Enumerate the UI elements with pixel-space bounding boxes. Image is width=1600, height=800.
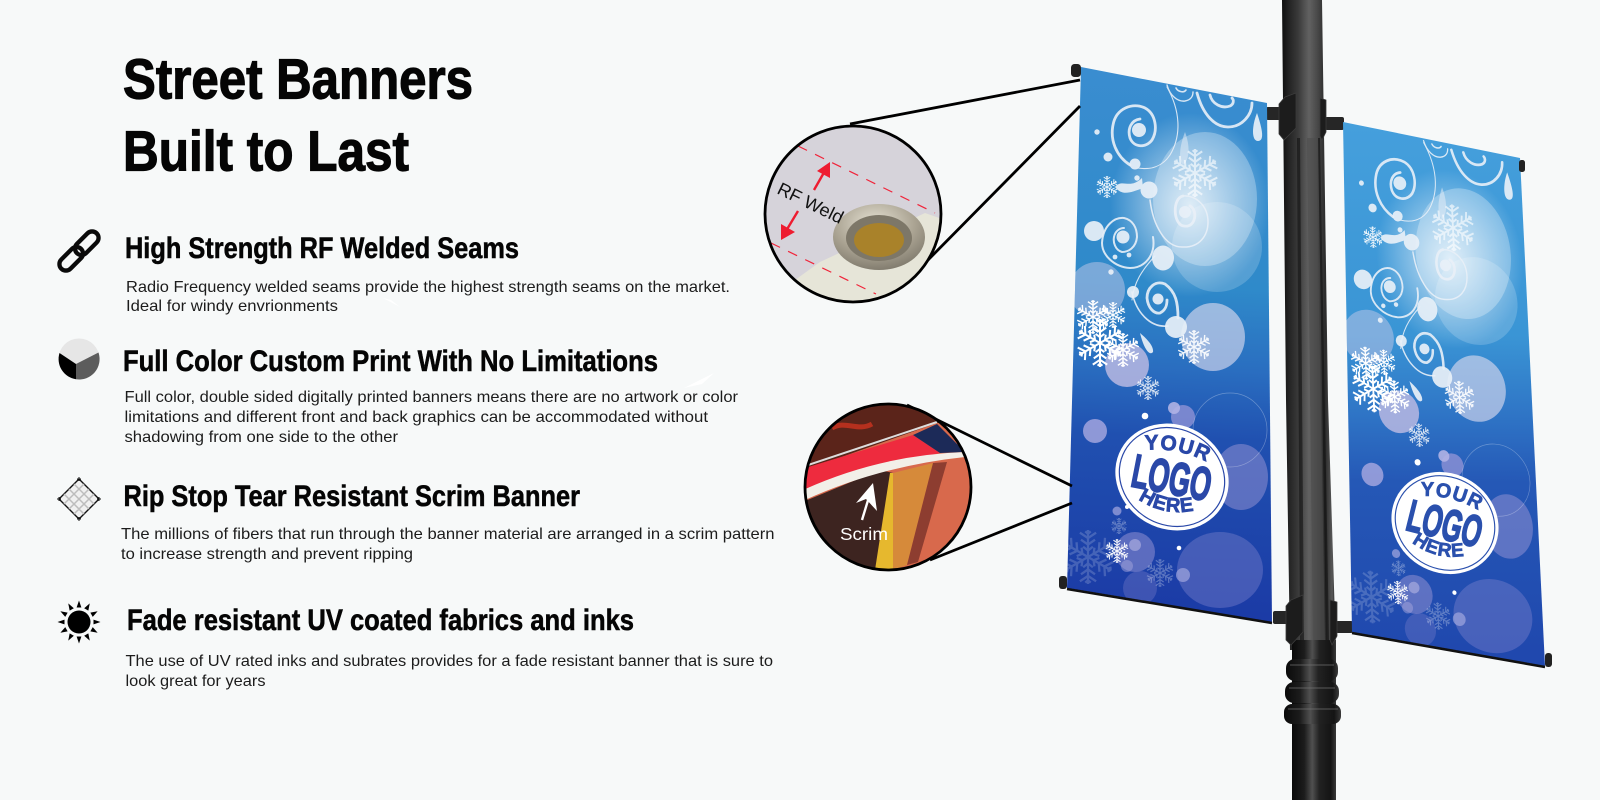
- label: Scrim: Scrim: [840, 524, 888, 544]
- text: seams description: Ideal for windy envrionments: [126, 298, 338, 315]
- logo badge: HERE: [1138, 488, 1194, 513]
- banner right: [1343, 122, 1552, 668]
- logo badge: YOUR: [1144, 434, 1210, 462]
- text: print description: [124, 389, 738, 446]
- banner fabric: [1067, 67, 1272, 622]
- callout leader lines: [850, 80, 1080, 260]
- icon: sun: [58, 600, 100, 644]
- text: scrim description: [121, 526, 774, 563]
- icon: color wheel: [58, 338, 100, 380]
- pole base with collars: [1284, 640, 1341, 800]
- upper bracket: [1266, 93, 1344, 140]
- lamp pole: [1266, 0, 1353, 800]
- text: seams description: [126, 279, 730, 315]
- callout ring: [765, 126, 941, 302]
- hardware: end caps and hem: [1059, 64, 1272, 623]
- heading: seams: High Strength RF Welded Seams: [125, 232, 519, 265]
- callout photo: grommet: [766, 127, 940, 300]
- feature: RF welded seams: [57, 229, 730, 315]
- white arrow: [856, 483, 877, 520]
- text: UV description: look great for years: [126, 673, 266, 690]
- text: scrim description: The millions of fibers that run through the banner material are arranged in a scrim pattern: [121, 526, 774, 543]
- banner left: [1059, 64, 1272, 624]
- logo badge: [1391, 472, 1499, 574]
- text: print description: Full color, double sided digitally printed banners means there are no artwork or color: [124, 389, 738, 406]
- title: Street Banners: [123, 48, 473, 112]
- banner fabric: [1343, 122, 1545, 666]
- logo badge: HERE: [1412, 532, 1464, 558]
- heading: UV: Fade resistant UV coated fabrics and inks: [127, 604, 634, 637]
- feature: fade resistant UV: [58, 600, 773, 690]
- text: seams description: Radio Frequency welded seams provide the highest strength seams on the market.: [126, 279, 730, 296]
- pole shaft: [1282, 0, 1336, 650]
- feature: full color print: [58, 338, 738, 446]
- icon: scrim mesh diamond: [57, 477, 101, 521]
- text: print description: limitations and different front and back graphics can be accommodated without: [124, 409, 709, 426]
- lower bracket: [1273, 595, 1353, 645]
- logo badge: [1115, 424, 1229, 530]
- heading: scrim: Rip Stop Tear Resistant Scrim Banner: [124, 480, 580, 513]
- logo badge: LOGO: [1128, 444, 1216, 511]
- title: [123, 48, 473, 184]
- hardware: end caps and hem: [1352, 160, 1552, 667]
- text: UV description: The use of UV rated inks and subrates provides for a fade resistant banner that is sure to: [126, 653, 773, 670]
- logo badge: YOUR: [1420, 482, 1483, 510]
- red arrows: [781, 162, 830, 240]
- callout: scrim: [800, 400, 1072, 575]
- text: scrim description: to increase strength and prevent ripping: [121, 546, 413, 563]
- text: print description: shadowing from one side to the other: [124, 429, 398, 446]
- callout photo: torn banner edge: [806, 405, 970, 569]
- label: RF Weld: RF Weld: [774, 179, 847, 228]
- banner artwork: [1346, 140, 1533, 654]
- heading: print: Full Color Custom Print With No Limitations: [123, 345, 658, 378]
- text: UV description: [126, 653, 773, 690]
- callout ring: [805, 404, 971, 570]
- logo badge: LOGO: [1402, 492, 1487, 558]
- callout leader lines: [907, 405, 1072, 560]
- icon: chain link: [57, 229, 101, 273]
- feature: rip stop scrim: [57, 477, 774, 563]
- banner artwork: [1061, 85, 1270, 608]
- callout: RF weld: [760, 80, 1080, 310]
- title: Built to Last: [123, 120, 409, 184]
